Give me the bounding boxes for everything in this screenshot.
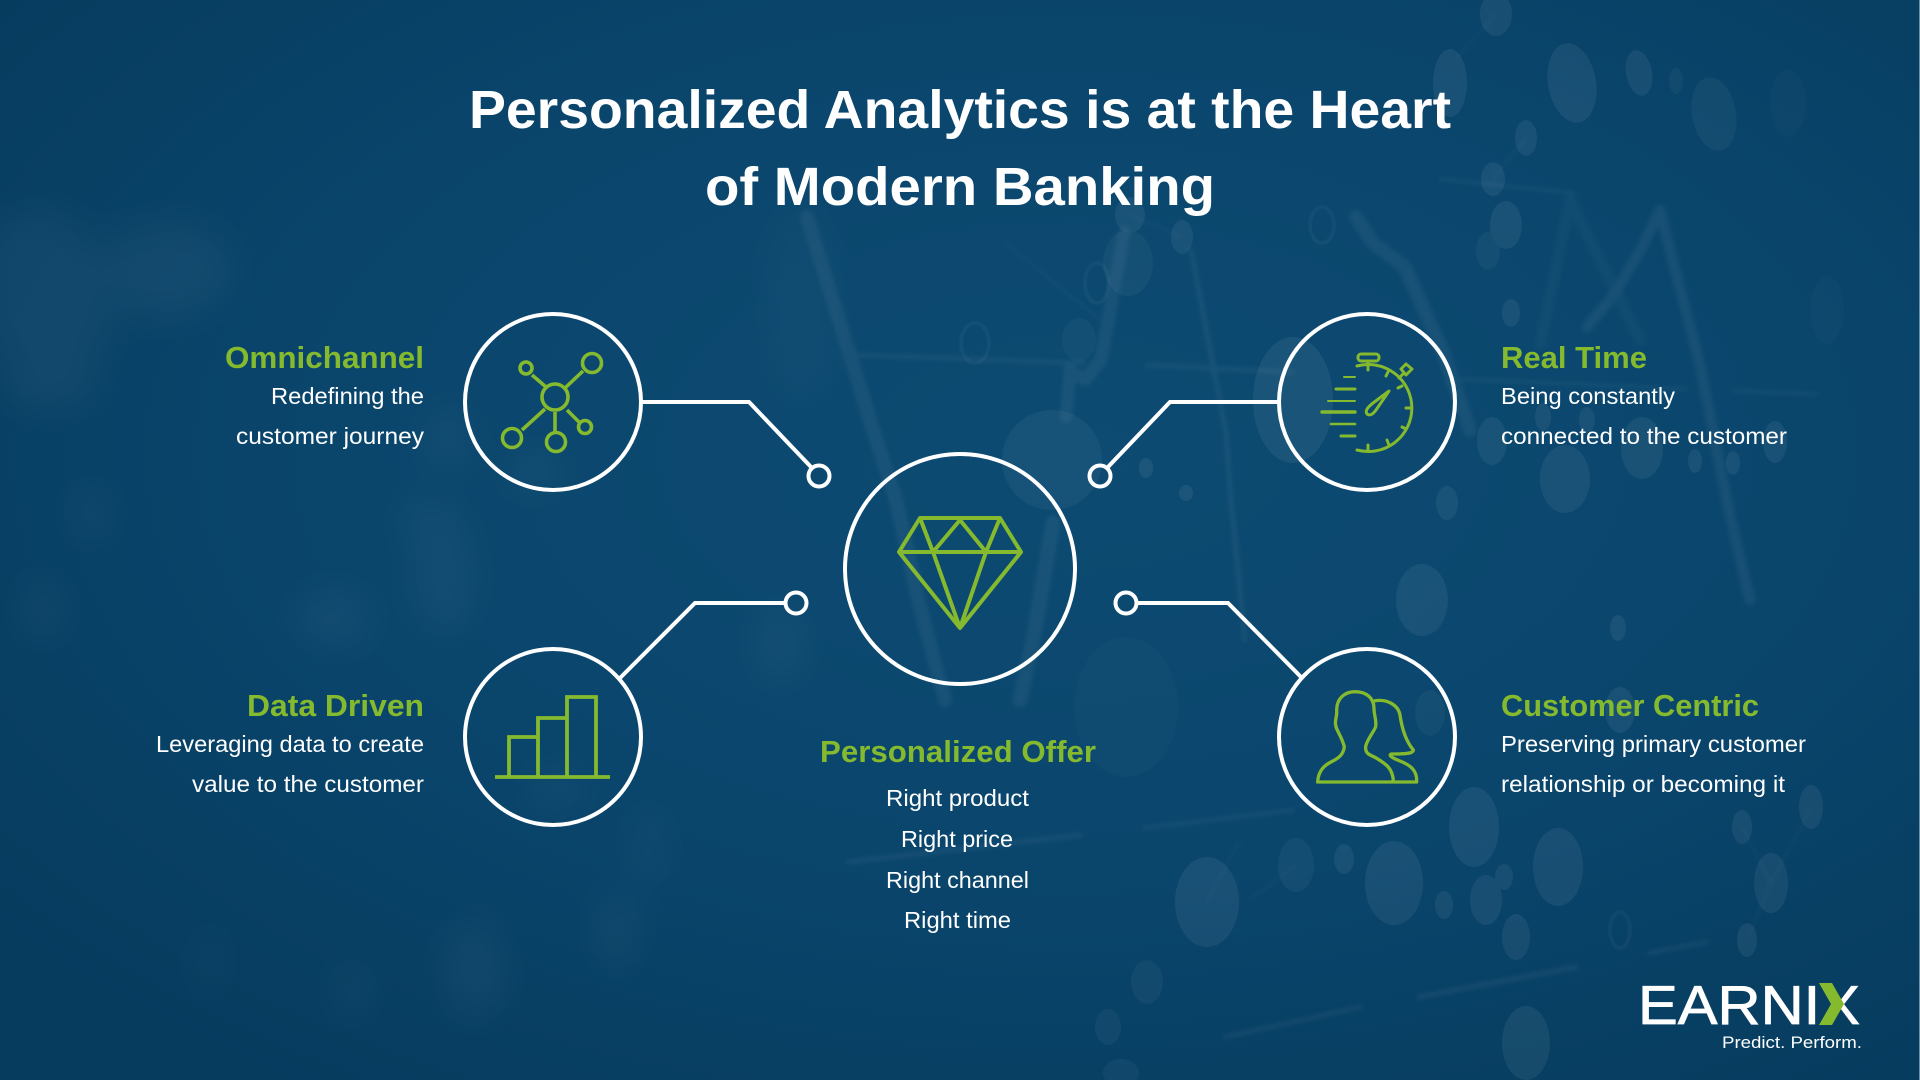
panel: personalized offer icon	[845, 454, 1075, 684]
connector: omnichannel	[640, 402, 830, 486]
text block: customer centric: relationship or becoming it	[1501, 771, 1786, 797]
text block: personalized offer: Right price	[901, 826, 1013, 852]
panel: customer centric icon	[1279, 649, 1455, 825]
panel: real time icon	[1279, 314, 1455, 490]
text block: data driven	[156, 688, 424, 797]
text block: personalized offer: Right product	[886, 785, 1030, 811]
logo: Earnix: EARNIX	[1638, 974, 1860, 1036]
text block: real time: connected to the customer	[1501, 423, 1787, 449]
icon: network	[502, 354, 602, 452]
text block: personalized offer	[820, 734, 1096, 933]
text block: omnichannel: customer journey	[236, 423, 425, 449]
text block: real time	[1501, 340, 1787, 449]
panel: omnichannel icon	[465, 314, 641, 490]
icon: diamond	[899, 518, 1021, 628]
title: Personalized Analytics is at the Heart	[469, 80, 1451, 140]
text block: personalized offer: Personalized Offer	[820, 734, 1096, 769]
logo: Earnix: Predict. Perform.	[1722, 1033, 1862, 1052]
text block: data driven: Leveraging data to create	[156, 731, 424, 757]
text block: omnichannel	[225, 340, 425, 449]
title: of Modern Banking	[705, 157, 1215, 217]
text block: personalized offer: Right channel	[886, 867, 1029, 893]
panel: data driven icon	[465, 649, 641, 825]
connector: customer centric	[1116, 592, 1301, 677]
text block: customer centric: Preserving primary customer	[1501, 731, 1806, 757]
text block: real time: Being constantly	[1501, 383, 1676, 409]
text block: omnichannel: Omnichannel	[225, 340, 424, 375]
text block: real time: Real Time	[1501, 340, 1647, 375]
title	[469, 80, 1451, 217]
connector: data driven	[620, 592, 806, 678]
text block: data driven: value to the customer	[192, 771, 424, 797]
icon: people	[1318, 692, 1417, 782]
text block: customer centric	[1501, 688, 1806, 797]
text block: data driven: Data Driven	[247, 688, 424, 723]
connector: real time	[1090, 402, 1279, 486]
text block: customer centric: Customer Centric	[1501, 688, 1759, 723]
text block: omnichannel: Redefining the	[271, 383, 424, 409]
icon: bar chart	[495, 697, 610, 777]
text block: personalized offer: Right time	[904, 907, 1011, 933]
icon: stopwatch	[1322, 354, 1412, 451]
